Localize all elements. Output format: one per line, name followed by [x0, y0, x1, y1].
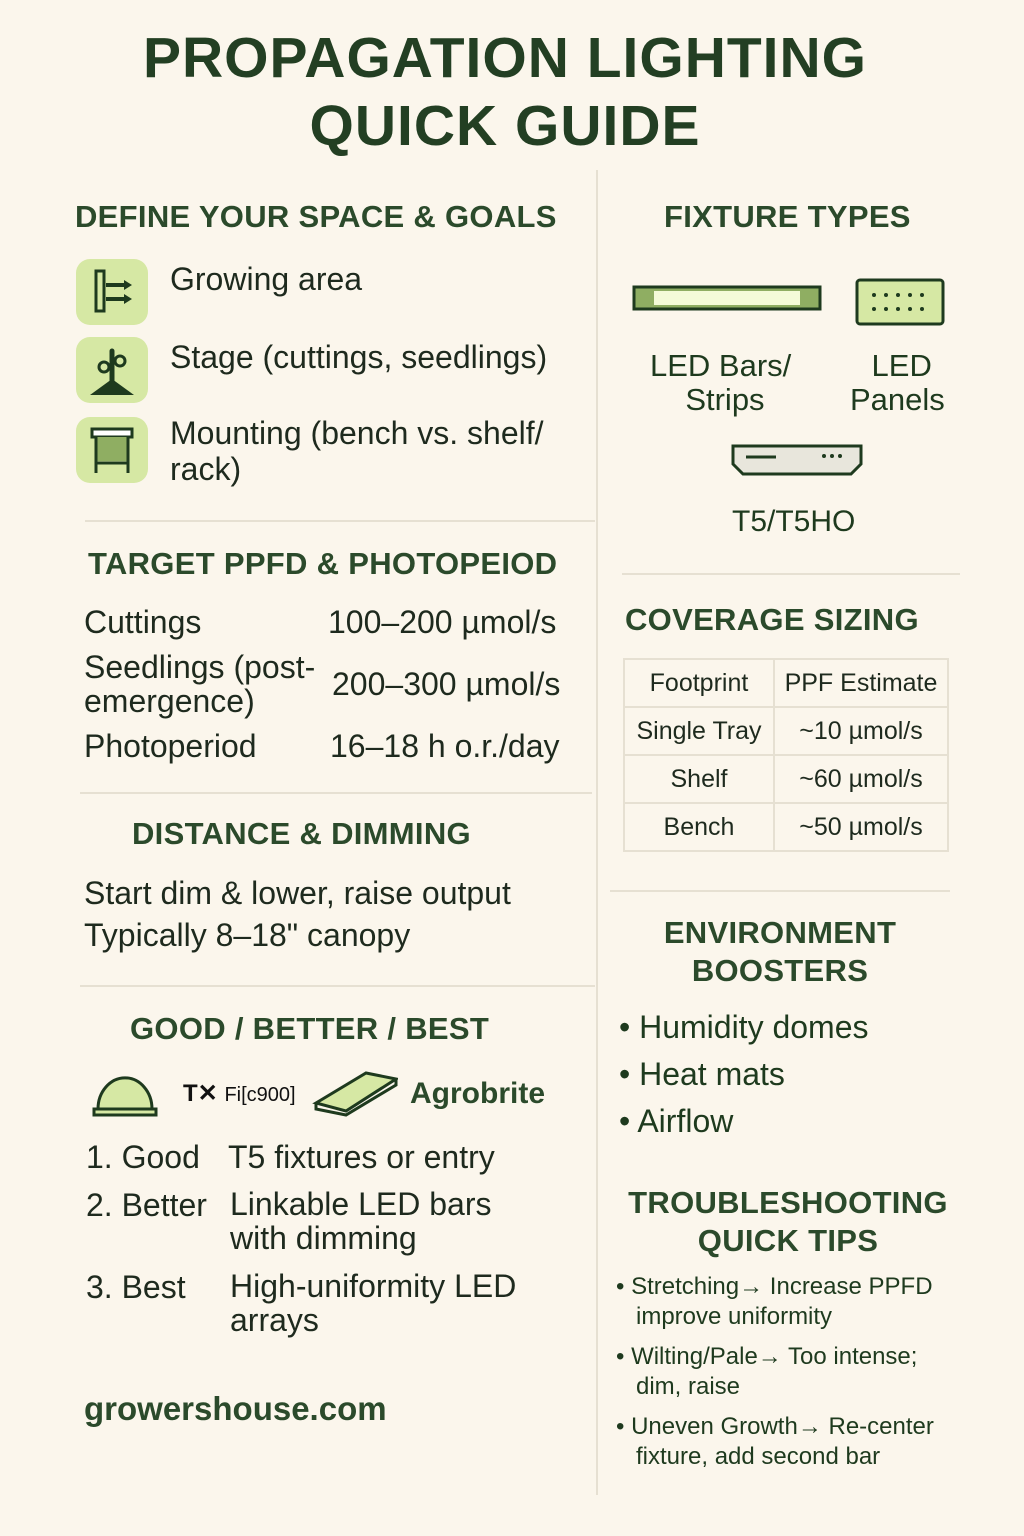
- panel: troubleshooting: • Uneven Growth→ Re-center: [616, 1413, 934, 1440]
- logo: brand: T✕ Fi[c900]: [183, 1080, 296, 1107]
- footer url: growershouse.com: [84, 1390, 387, 1427]
- label: led bars: LED Bars/: [650, 348, 791, 383]
- text: stage: Stage (cuttings, seedlings): [170, 339, 547, 375]
- icon: stage: [76, 337, 148, 403]
- list: tiers: High-uniformity LED: [230, 1268, 516, 1304]
- table: coverage: [623, 658, 949, 852]
- table: coverage: ~60 µmol/s: [799, 764, 923, 792]
- table: coverage: ~10 µmol/s: [799, 716, 923, 744]
- heading: troubleshooting: QUICK TIPS: [698, 1223, 878, 1258]
- heading: troubleshooting: [628, 1185, 948, 1258]
- heading: coverage: COVERAGE SIZING: [625, 602, 919, 637]
- panel: troubleshooting: • Wilting/Pale→ Too intense;: [616, 1343, 917, 1370]
- ppfd rows: emergence): [84, 683, 255, 719]
- panel: troubleshooting: fixture, add second bar: [636, 1443, 880, 1470]
- column divider: [596, 170, 598, 1495]
- heading: fixture: FIXTURE TYPES: [664, 199, 911, 234]
- ppfd rows: 100–200 µmol/s: [328, 604, 556, 640]
- text: distance: Typically 8–18" canopy: [84, 917, 410, 953]
- ppfd rows: Photoperiod: [84, 728, 257, 764]
- list: tiers: T5 fixtures or entry: [228, 1139, 495, 1175]
- list: tips: [616, 1273, 934, 1470]
- table: coverage: PPF Estimate: [785, 668, 937, 696]
- panel: troubleshooting: improve uniformity: [636, 1303, 832, 1330]
- text: mounting: Mounting (bench vs. shelf/: [170, 415, 544, 451]
- table: coverage: Shelf: [670, 764, 727, 792]
- heading: ppfd: TARGET PPFD & PHOTOPEIOD: [88, 546, 557, 581]
- panel: troubleshooting: dim, raise: [636, 1373, 740, 1400]
- label: led bars: Strips: [685, 382, 765, 417]
- text: mounting: rack): [170, 451, 241, 487]
- icon: growing area: [76, 259, 148, 325]
- panel: environment boosters: [619, 915, 896, 1139]
- table: coverage: Single Tray: [636, 716, 762, 744]
- ppfd rows: 16–18 h o.r./day: [330, 728, 560, 764]
- list: boosters: • Humidity domes: [619, 1009, 868, 1045]
- title: QUICK GUIDE: [309, 94, 701, 158]
- ppfd rows: Seedlings (post-: [84, 649, 315, 685]
- title: PROPAGATION LIGHTING: [143, 26, 867, 90]
- list: tiers: with dimming: [230, 1220, 417, 1256]
- ppfd rows: 200–300 µmol/s: [332, 666, 560, 702]
- heading: define: DEFINE YOUR SPACE & GOALS: [75, 199, 557, 234]
- icon: t5: [732, 444, 862, 476]
- panel: troubleshooting: • Stretching→ Increase PPFD: [616, 1273, 933, 1300]
- panel: target ppfd: [84, 546, 560, 764]
- heading: environment: BOOSTERS: [692, 953, 868, 988]
- list: tiers: 3. Best: [86, 1269, 186, 1305]
- panel: distance & dimming: [84, 816, 511, 953]
- title: [143, 26, 867, 158]
- icon: mounting: [76, 417, 148, 483]
- table: coverage: Bench: [664, 812, 734, 840]
- panel: coverage sizing: [623, 602, 949, 852]
- text: distance: [84, 875, 511, 953]
- list: tiers: 1. Good: [86, 1139, 200, 1175]
- heading: gbb: GOOD / BETTER / BEST: [130, 1011, 489, 1046]
- label: t5: T5/T5HO: [732, 505, 855, 538]
- list: boosters: [619, 1009, 868, 1139]
- text: mounting: [170, 415, 544, 487]
- table: coverage: Footprint: [650, 668, 748, 696]
- panel: fixture types: [632, 199, 945, 538]
- table: coverage: ~50 µmol/s: [799, 812, 923, 840]
- list: tiers: [86, 1139, 516, 1338]
- list: tiers: arrays: [230, 1302, 319, 1338]
- list: boosters: • Airflow: [619, 1103, 733, 1139]
- list: tiers: 2. Better: [86, 1187, 207, 1223]
- icon: panel: [312, 1071, 398, 1117]
- label: led panels: Panels: [850, 382, 945, 417]
- text: growing area: Growing area: [170, 261, 362, 297]
- label: led panels: [850, 348, 945, 417]
- heading: distance: DISTANCE & DIMMING: [132, 816, 471, 851]
- panel: troubleshooting: [616, 1185, 948, 1470]
- heading: environment: ENVIRONMENT: [664, 915, 896, 950]
- ppfd rows: Cuttings: [84, 604, 201, 640]
- ppfd rows: [84, 604, 560, 764]
- icon: led bar: [632, 286, 822, 310]
- logo: agrobrite: Agrobrite: [410, 1077, 545, 1110]
- heading: environment: [664, 915, 896, 988]
- list: tiers: Linkable LED bars: [230, 1186, 491, 1222]
- panel: good better best: [86, 1011, 545, 1338]
- label: led bars: [650, 348, 792, 417]
- icon: led panel: [856, 278, 944, 326]
- heading: troubleshooting: TROUBLESHOOTING: [628, 1185, 948, 1220]
- list: boosters: • Heat mats: [619, 1056, 785, 1092]
- icon: dome: [92, 1076, 158, 1116]
- label: led panels: LED: [872, 348, 932, 383]
- text: distance: Start dim & lower, raise output: [84, 875, 511, 911]
- panel: define your space: [75, 199, 557, 487]
